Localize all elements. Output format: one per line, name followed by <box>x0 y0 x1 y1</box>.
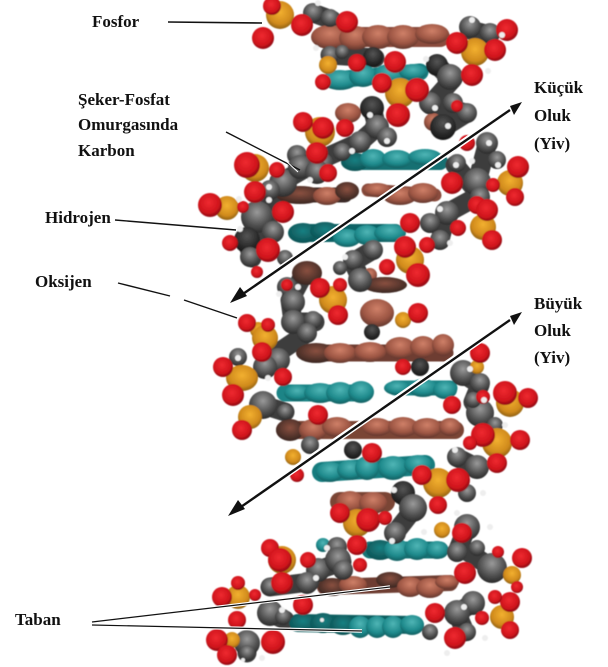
label: oxygen <box>35 272 237 318</box>
oxygen atoms <box>198 0 538 665</box>
label: hydrogen <box>45 208 236 230</box>
label: minor groove: Oluk <box>534 106 571 125</box>
label: phosphorus: Fosfor <box>92 12 140 31</box>
label: sugar-phosphate backbone carbon <box>78 90 300 172</box>
base pair bars backing <box>285 37 455 625</box>
arrow: minor groove <box>230 102 522 303</box>
label: minor groove: (Yiv) <box>534 134 570 153</box>
label: sugar-phosphate backbone carbon: Karbon <box>78 141 135 160</box>
label: minor groove <box>534 78 584 153</box>
label: oxygen: Oksijen <box>35 272 92 291</box>
arrow: major groove <box>228 312 522 516</box>
backbone backing <box>247 13 492 653</box>
label: base <box>15 587 390 631</box>
label: major groove: Oluk <box>534 321 571 340</box>
label: hydrogen: Hidrojen <box>45 208 111 227</box>
label: sugar-phosphate backbone carbon: Omurgasında <box>78 115 179 134</box>
label: major groove: Büyük <box>534 294 583 313</box>
DNA double helix model <box>198 0 538 665</box>
label: sugar-phosphate backbone carbon: Şeker-Fosfat <box>78 90 170 109</box>
label: major groove: (Yiv) <box>534 348 570 367</box>
hydrogen atoms <box>235 0 508 662</box>
label: major groove <box>534 294 583 367</box>
label: minor groove: Küçük <box>534 78 584 97</box>
phosphorus atoms <box>215 1 524 648</box>
label: base: Taban <box>15 610 61 629</box>
base pairs <box>276 24 461 638</box>
sugar-phosphate carbon atoms <box>229 3 507 661</box>
